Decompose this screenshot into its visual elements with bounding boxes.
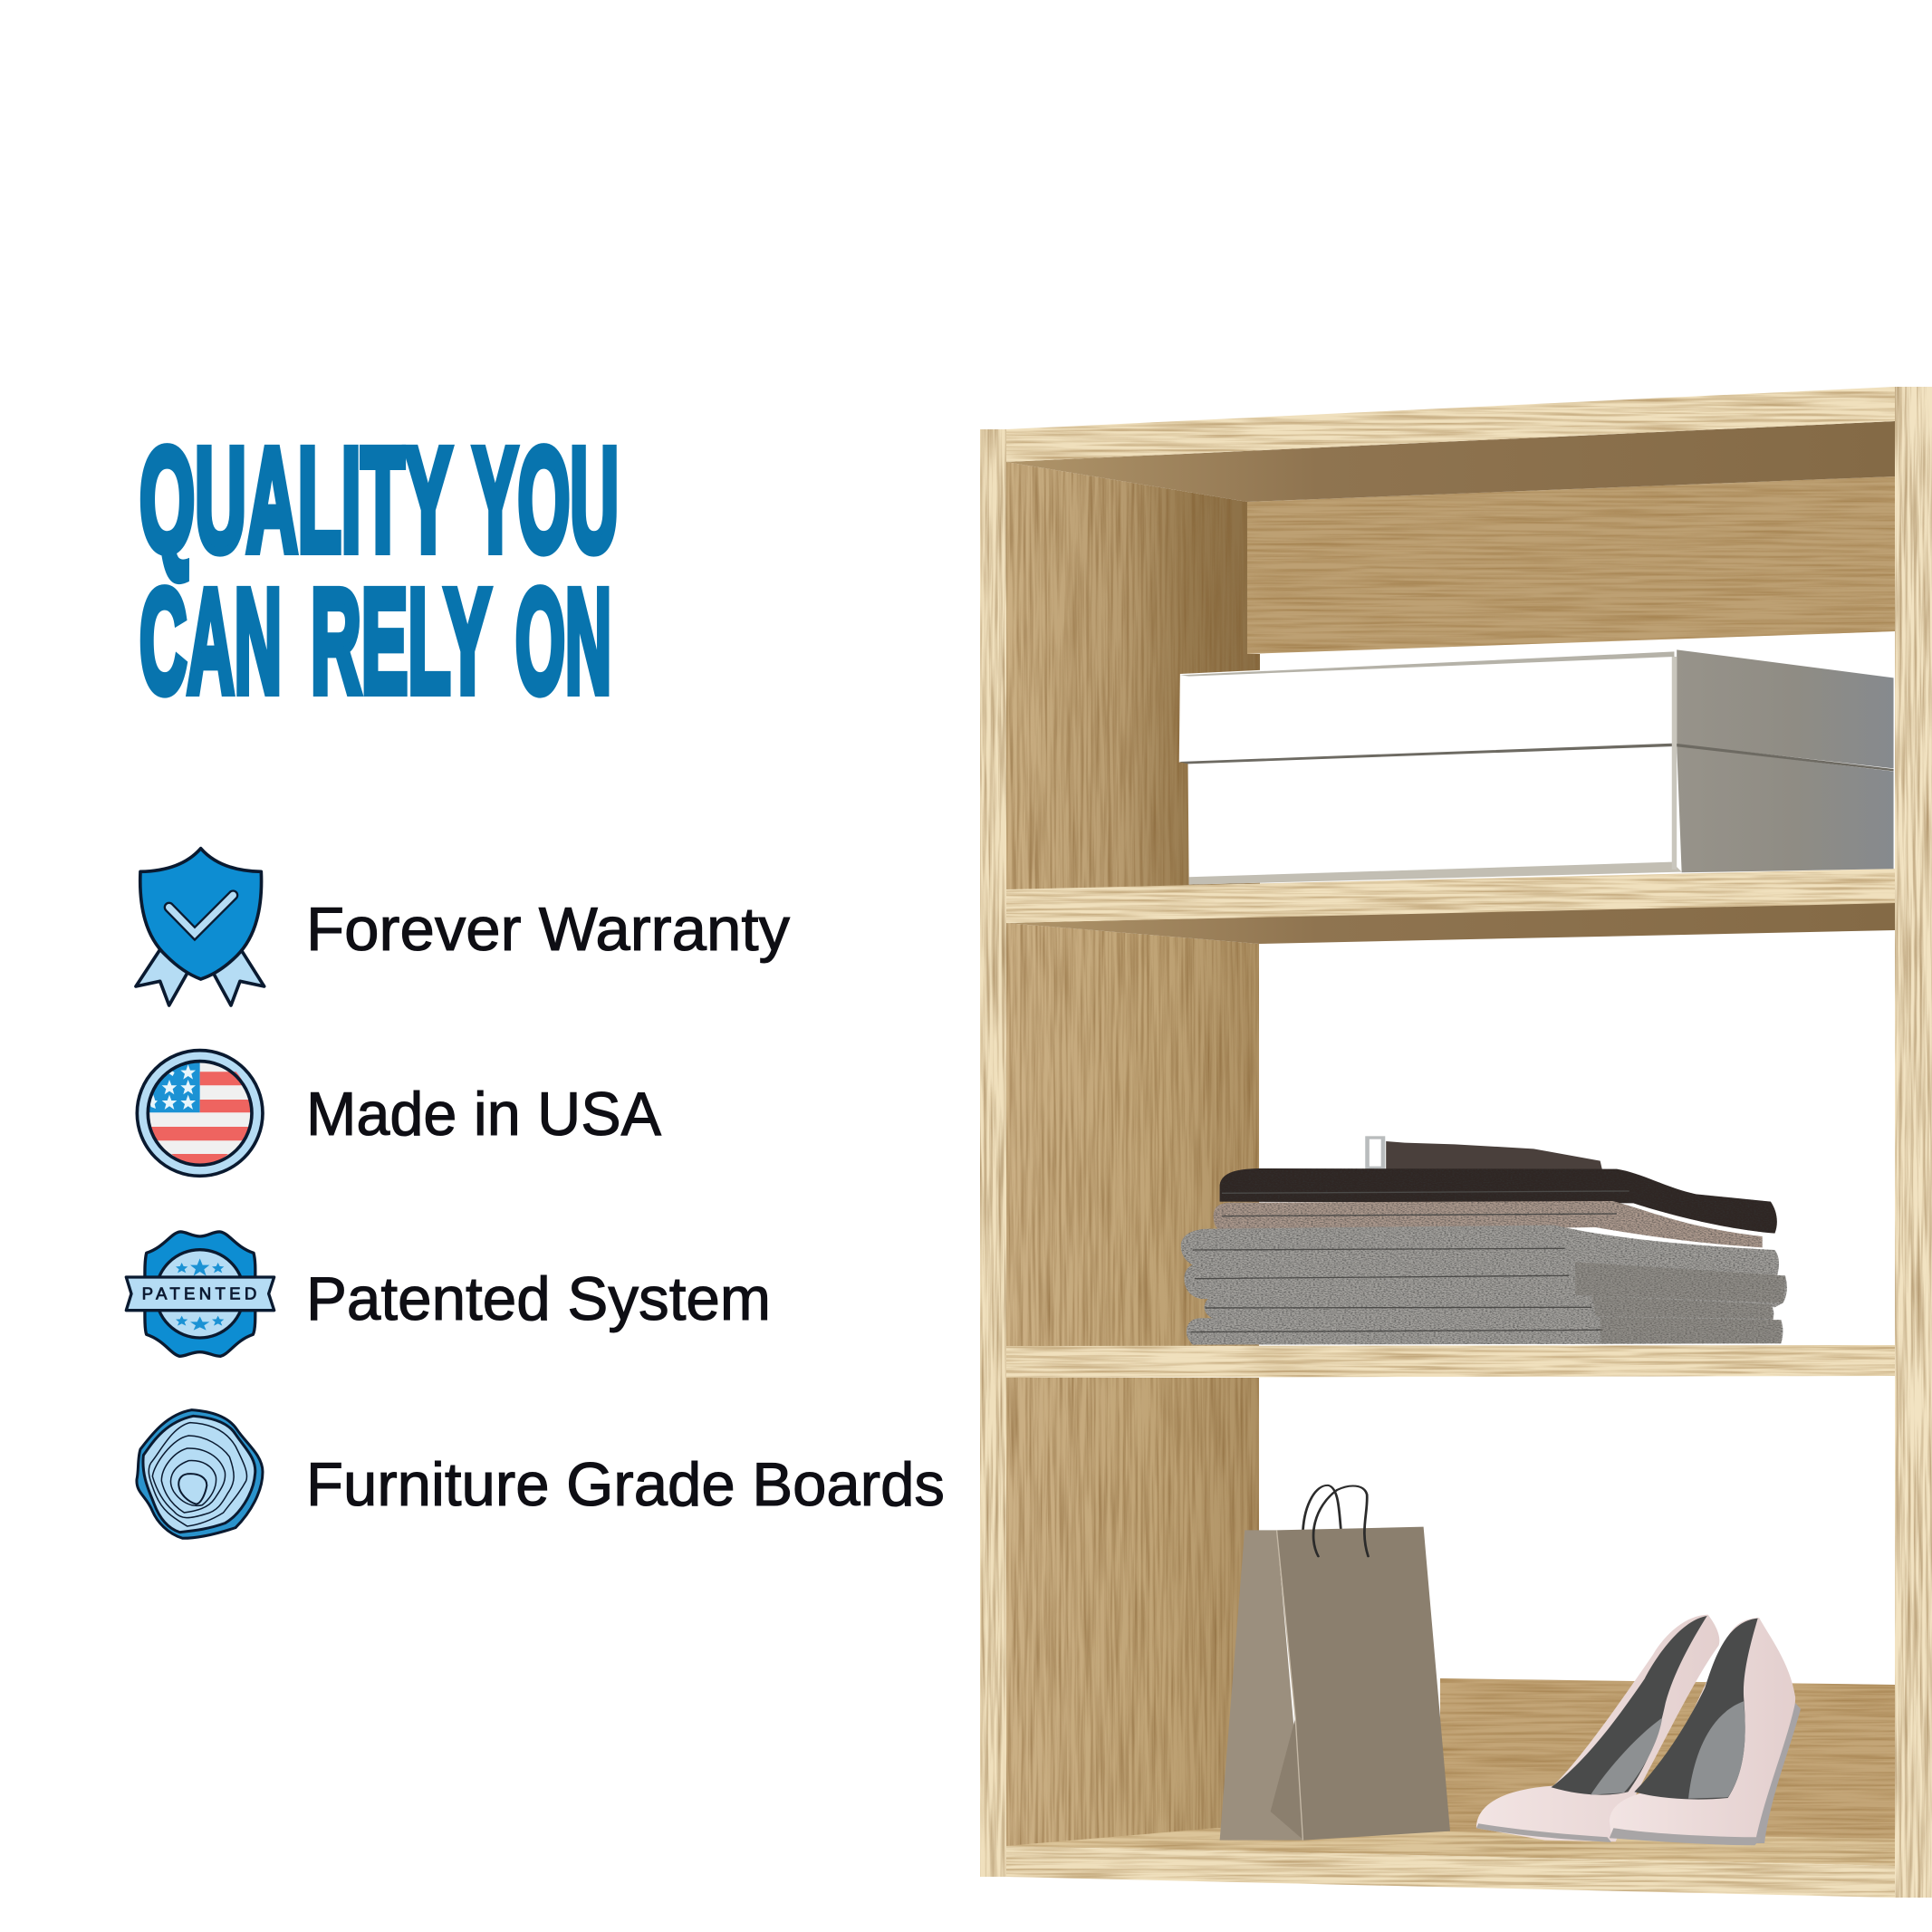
icon: warranty shield with ribbons: [136, 849, 264, 1005]
label: made in usa: Made in USA: [306, 1080, 662, 1149]
bag front panel: [1271, 1527, 1450, 1841]
shoebox: [1179, 649, 1894, 885]
icon: usa flag badge: [137, 1051, 263, 1176]
inner wall: upper compartment: [1006, 462, 1260, 889]
bottom shelf front: [1006, 1846, 1895, 1898]
box lid side: [1677, 649, 1894, 768]
label: patented system: Patented System: [306, 1264, 771, 1333]
shelving unit: [980, 387, 1932, 1898]
left shoe: [1476, 1615, 1719, 1842]
underside of first shelf: [1006, 902, 1895, 944]
text: ON: [515, 558, 611, 724]
folded clothes and belt: [1181, 1138, 1787, 1345]
text: YOU: [473, 417, 619, 582]
underside of top board: [1006, 421, 1895, 502]
top board: [1006, 387, 1895, 462]
label: forever warranty: Forever Warranty: [306, 895, 790, 964]
right post: [1895, 387, 1932, 1898]
icon: wood rings: [137, 1410, 263, 1538]
bag side panel: [1220, 1530, 1303, 1841]
rear bag handle: [1302, 1485, 1341, 1533]
inner wall: lower compartment: [1006, 1378, 1259, 1848]
label: furniture grade boards: Furniture Grade Boards: [306, 1450, 945, 1519]
left post: [980, 429, 1006, 1877]
dark sweater: [1220, 1168, 1777, 1234]
taupe fold: [1214, 1201, 1763, 1247]
fold shadows: [1190, 1191, 1629, 1332]
first shelf: [1006, 869, 1895, 923]
belt: [1368, 1138, 1602, 1170]
bottom shelf surface: [1006, 1828, 1895, 1866]
box lid front: [1179, 650, 1674, 763]
second shelf: [1006, 1345, 1895, 1378]
back board: lower: [1440, 1678, 1895, 1848]
grey folds: [1181, 1226, 1787, 1345]
title: quality you can rely on: RELY: [311, 558, 491, 724]
inner wall: middle compartment: [1006, 923, 1259, 1346]
feature list: [126, 849, 945, 1538]
box base front: [1188, 745, 1682, 885]
shopping bag: [1220, 1485, 1450, 1841]
side shading of the folds: [1575, 1262, 1785, 1343]
right shoe: [1610, 1618, 1801, 1845]
front bag handle: [1313, 1485, 1369, 1556]
icon: patented seal: [126, 1232, 274, 1356]
box base side: [1677, 745, 1894, 872]
high heel shoes: [1476, 1615, 1801, 1845]
icon: patented seal: PATENTED: [142, 1283, 256, 1302]
back board: upper: [1247, 476, 1895, 654]
title: quality you can rely on: [139, 417, 619, 724]
title: quality you can rely on: QUALITY: [139, 417, 452, 582]
title: quality you can rely on: CAN: [139, 558, 282, 724]
